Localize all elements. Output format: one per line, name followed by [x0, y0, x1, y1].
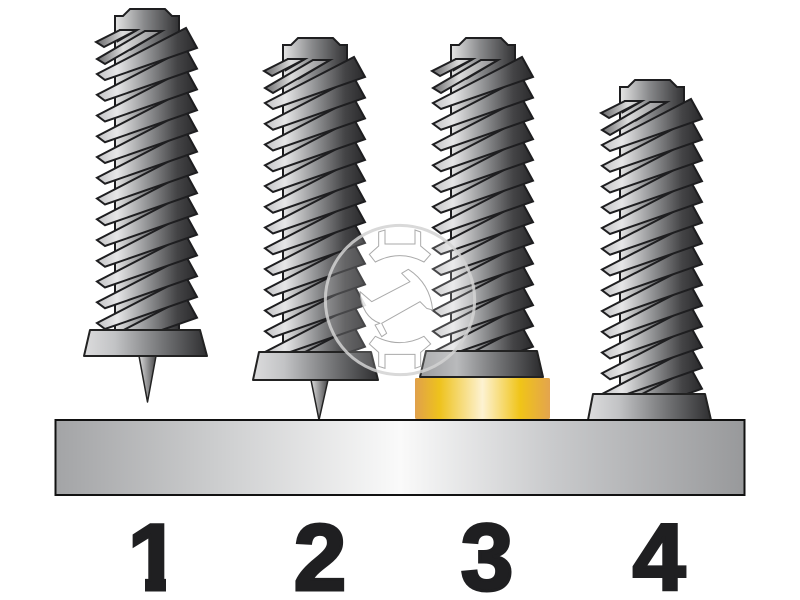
- watermark top profile: [369, 230, 431, 262]
- stud 1: tip above plate: [84, 9, 207, 402]
- watermark logo: [325, 225, 475, 375]
- stud 1 flange: [84, 330, 207, 356]
- watermark ring: [325, 225, 475, 375]
- stud 1 pointed tip: [139, 356, 156, 402]
- stud 4: welded to plate: [588, 80, 711, 421]
- stud 2 flange: [253, 352, 378, 380]
- plate top edge: [55, 419, 745, 421]
- stud 3: welding with molten ring: [415, 38, 550, 419]
- stud 3 flange: [420, 351, 543, 377]
- watermark centre profile: [360, 269, 433, 337]
- step numbers: [120, 505, 686, 600]
- watermark bottom profile: [369, 336, 431, 368]
- molten weld ring: [415, 378, 550, 419]
- base plate: [56, 420, 744, 495]
- stud 2 threaded shank: [264, 38, 365, 379]
- stud 3 threaded shank: [432, 38, 533, 379]
- stud 2 pointed tip: [311, 380, 328, 420]
- stud 1 threaded shank: [96, 9, 197, 350]
- stud 2: tip touching plate: [253, 38, 378, 420]
- stud 4 flange: [588, 394, 711, 420]
- stud 4 threaded shank: [601, 80, 702, 421]
